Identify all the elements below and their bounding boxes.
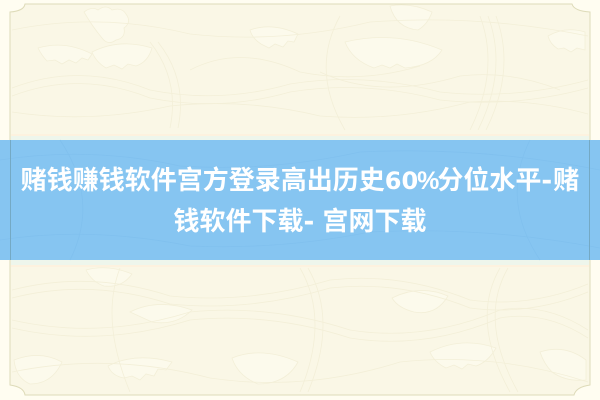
title: headline text: 钱软件下载- 宫网下载 xyxy=(173,206,427,237)
title: headline text xyxy=(21,165,579,237)
panel: blue title band xyxy=(0,140,600,260)
title: headline text: 赌钱赚钱软件宫方登录高出历史60%分位水平-赌 xyxy=(21,165,579,196)
